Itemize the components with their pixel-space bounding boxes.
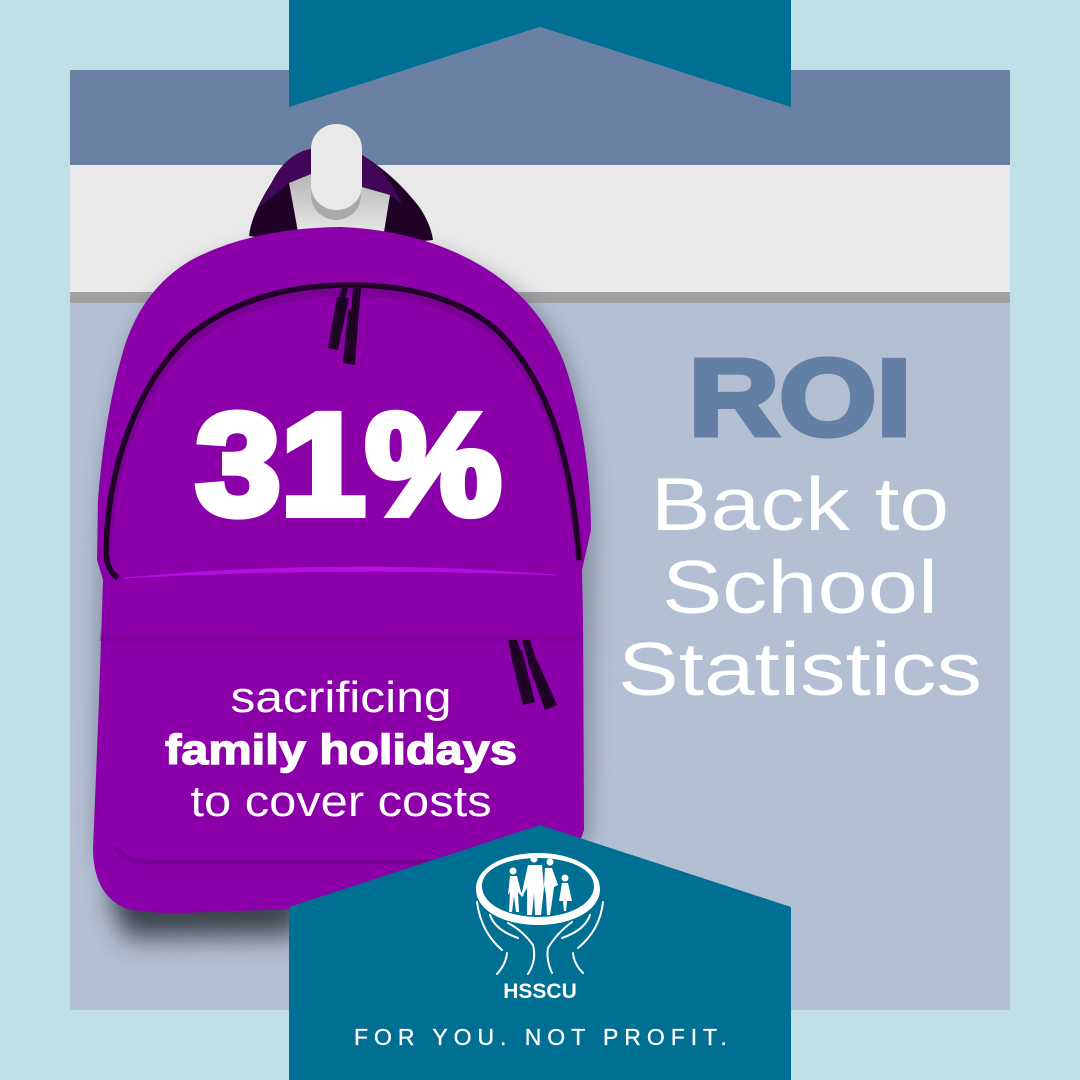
heading: Back to School Statistics — [618, 463, 982, 711]
heading: Back to School Statistics: Back to — [651, 463, 949, 546]
logo ring — [476, 853, 600, 925]
backpack handle — [249, 149, 433, 250]
stat: 31%: 31% — [196, 385, 501, 545]
illustration: backpack — [93, 124, 591, 913]
bottom teal banner — [289, 825, 791, 1080]
top teal banner — [289, 0, 791, 107]
heading: Back to School Statistics: Statistics — [618, 628, 982, 711]
zipper pulls top — [328, 288, 361, 365]
logo hands — [477, 902, 603, 974]
zipper pulls pocket — [508, 640, 557, 710]
backpack shadow — [93, 235, 597, 938]
backpack body — [93, 227, 591, 913]
stat caption: to cover costs — [190, 776, 492, 825]
logo wordmark: HSSCU — [503, 980, 577, 1003]
tagline: FOR YOU. NOT PROFIT. — [354, 1024, 733, 1050]
top zipper — [106, 285, 580, 578]
stat caption — [165, 673, 517, 825]
pocket fold — [117, 846, 500, 862]
heading: ROI: ROI — [689, 337, 911, 458]
panel: backdrop wall — [70, 27, 1010, 1010]
heading: Back to School Statistics: School — [662, 545, 938, 629]
stat caption: family holidays — [165, 726, 517, 773]
pocket highlight seam — [125, 567, 555, 578]
logo family figures — [508, 856, 572, 915]
hook on wall — [311, 124, 362, 220]
logo: family in cupped hands — [476, 853, 603, 1003]
stat caption: sacrificing — [230, 673, 452, 721]
pocket flap shading — [100, 628, 583, 641]
